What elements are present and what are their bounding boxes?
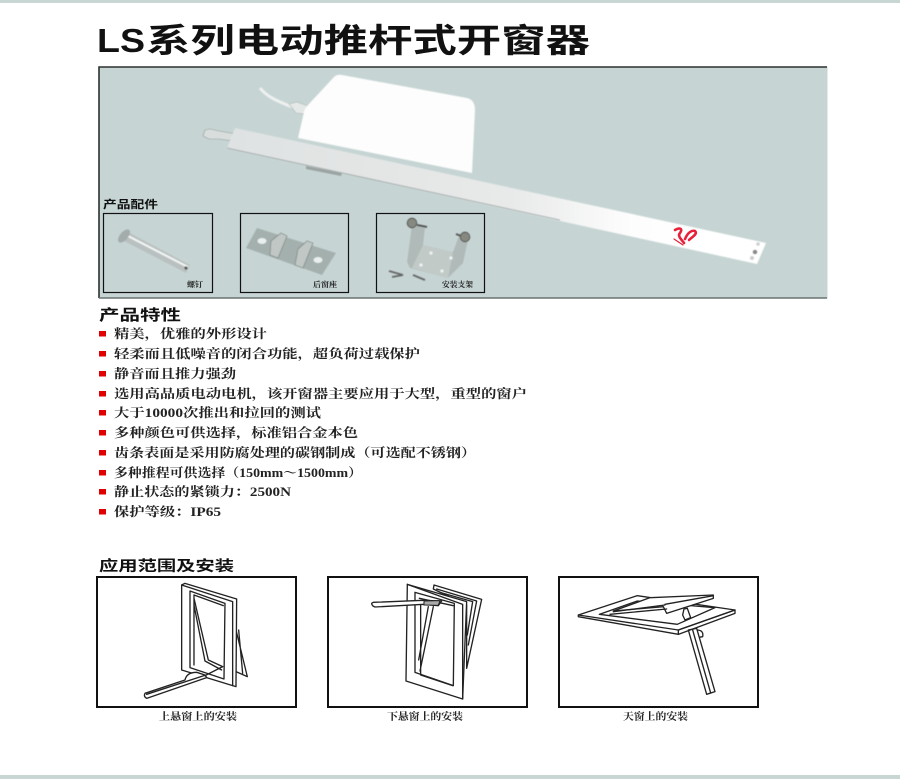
bullet item: 大于10000次推出和拉回的测试 (114, 405, 322, 420)
heading: accessories: 产品配件 (103, 197, 158, 211)
bullet item: 多种颜色可供选择，标准铝合金本色 (114, 425, 359, 440)
panel: mounting bracket (376, 214, 484, 292)
icon: actuator motor and push rod (203, 75, 766, 264)
title (97, 22, 590, 59)
caption: 安装支架 (442, 279, 474, 289)
panel: rear window seat (240, 214, 348, 292)
caption: 上悬窗上的安装 (159, 710, 237, 723)
panel: skylight (559, 577, 758, 723)
bullet item (99, 504, 221, 519)
bullet item: 静音而且推力强劲 (114, 366, 237, 381)
panel: screw (104, 214, 212, 292)
feature list (99, 326, 527, 519)
icon: top-hung window diagram (144, 583, 247, 698)
bullet item: 齿条表面是采用防腐处理的碳钢制成（可选配不锈钢） (114, 445, 476, 460)
bullet item: 静止状态的紧锁力：2500N (114, 484, 291, 499)
heading: application and installation: 应用范围及安装 (99, 557, 235, 575)
heading: product features: 产品特性 (99, 306, 181, 324)
bullet item: 保护等级：IP65 (114, 504, 221, 519)
icon: U bracket (389, 218, 470, 280)
bullet item: 多种推程可供选择（150mm～1500mm） (114, 465, 362, 480)
icon: bottom-hung window diagram (372, 584, 482, 699)
title: 系列电动推杆式开窗器 (146, 22, 590, 59)
title: LS (97, 22, 145, 59)
caption: 下悬窗上的安装 (387, 710, 463, 723)
icon: rear bracket (246, 228, 336, 275)
bullet item (99, 326, 268, 341)
bullet item: 轻柔而且低噪音的闭合功能，超负荷过载保护 (114, 346, 421, 361)
panel: bottom-hung window (328, 577, 527, 723)
caption: 天窗上的安装 (623, 710, 688, 723)
panel: product photo (98, 66, 828, 298)
bullet item: 精美，优雅的外形设计 (114, 326, 268, 341)
bullet item: 选用高品质电动电机，该开窗器主要应用于大型，重型的窗户 (114, 386, 527, 401)
icon: red logo (674, 229, 696, 245)
icon: skylight diagram (578, 595, 735, 694)
icon: screw pin (116, 227, 190, 273)
bullet item (99, 366, 237, 381)
panel: top-hung window (97, 577, 296, 723)
caption: 后窗座 (313, 279, 338, 289)
caption: 螺钉 (187, 279, 204, 289)
